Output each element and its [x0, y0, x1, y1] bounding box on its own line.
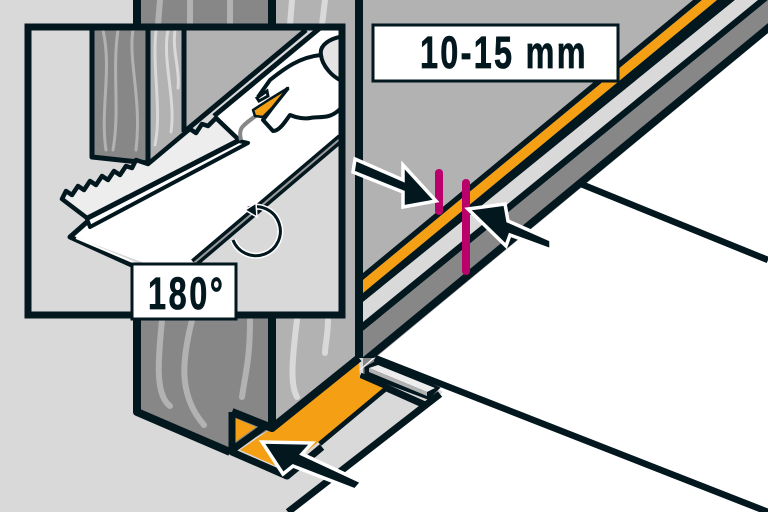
profile lip — [366, 361, 438, 398]
inset: hand holding trowel — [253, 36, 345, 131]
arrow: to wall marker — [353, 159, 436, 207]
label: 180 degrees — [132, 264, 236, 319]
inset: notched trowel — [62, 115, 257, 227]
wooden post — [137, 0, 359, 452]
inset: post — [92, 27, 184, 163]
label: 10-15 mm — [373, 25, 618, 81]
inset: rotation arrow — [233, 203, 280, 256]
bottom strip and floor lines — [288, 376, 440, 512]
arrow: to orange strip — [262, 442, 362, 490]
label: 180 degrees: 180° — [148, 270, 223, 319]
inset: white board — [70, 27, 345, 267]
white floor panels — [288, 0, 768, 512]
inset: wall — [186, 30, 302, 126]
arrow: to board marker — [468, 204, 551, 250]
orange adhesive strip — [232, 358, 383, 476]
label: 10-15 mm: 10-15 mm — [420, 29, 586, 78]
magenta distance markers — [435, 169, 470, 275]
inset panel — [28, 27, 345, 315]
wall and diagonal profile bands — [363, 0, 768, 400]
